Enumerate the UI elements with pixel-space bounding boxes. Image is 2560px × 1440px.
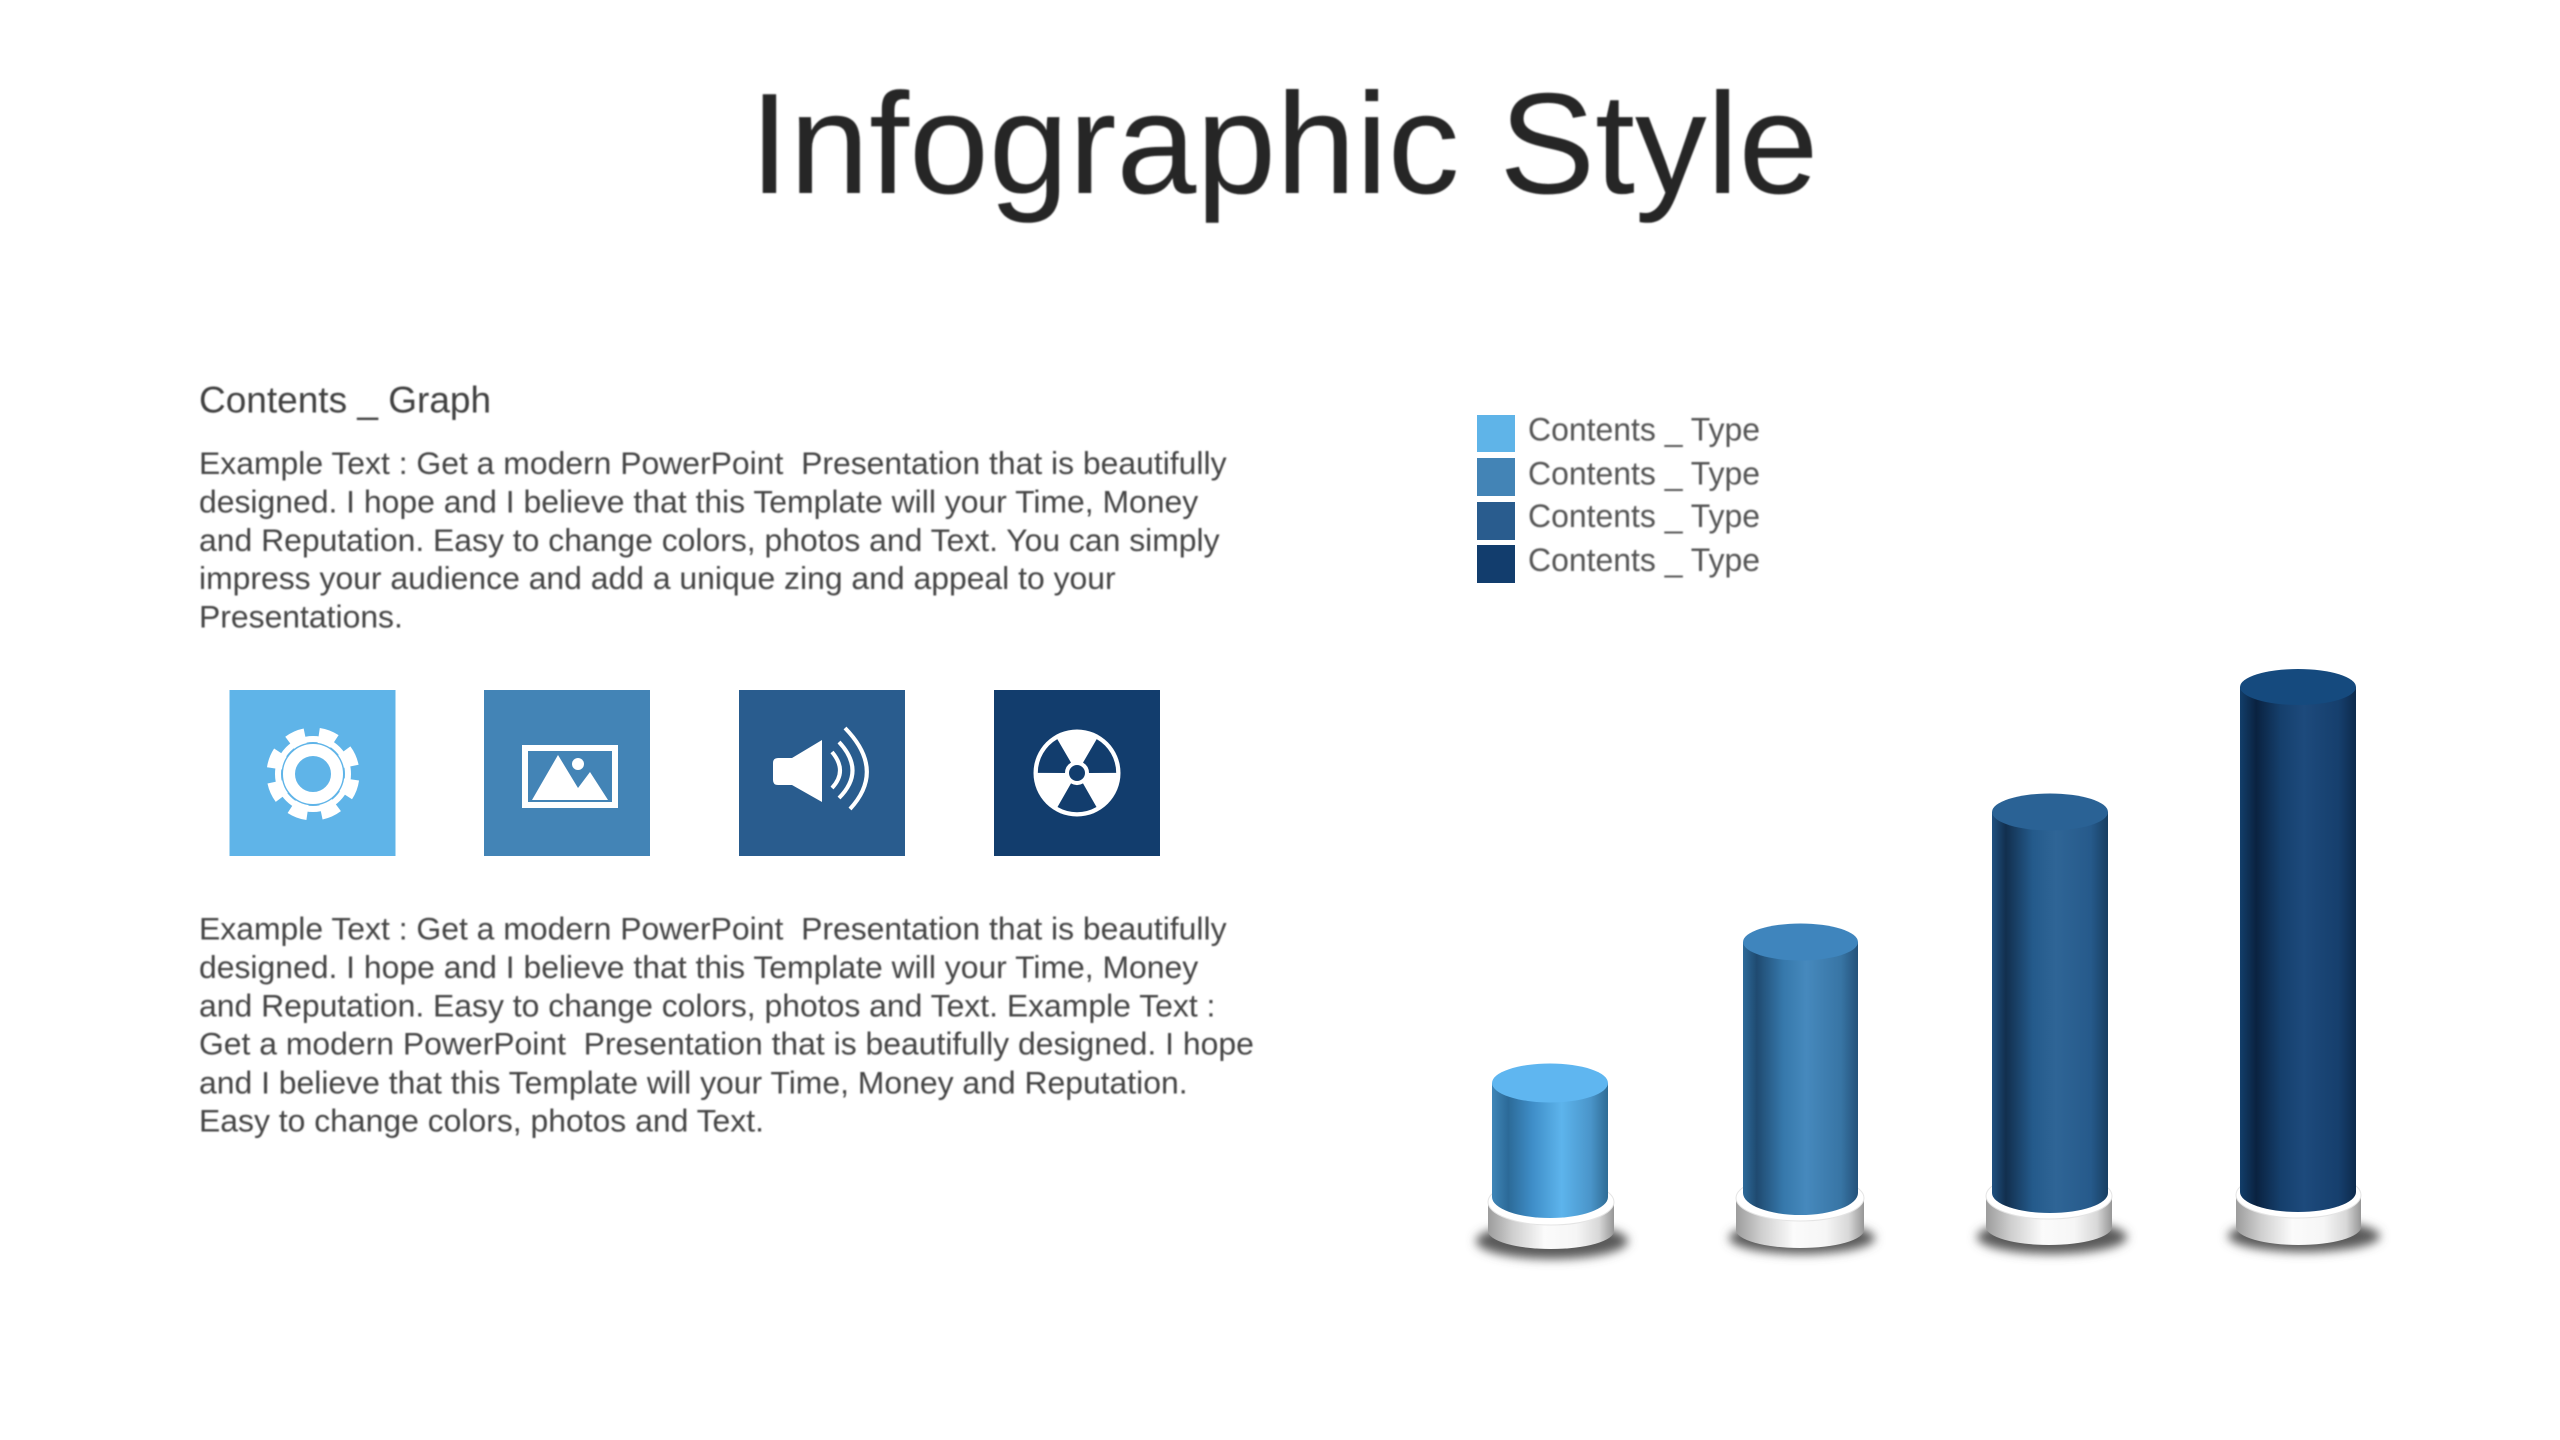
bar 1 [1476, 1064, 1628, 1259]
bar 4 [2228, 669, 2380, 1252]
legend item 1: Contents _ Type [1528, 412, 1760, 448]
text block: upper paragraph: Example Text : Get a modern PowerPoint Presentation that is beautifully [199, 445, 1227, 481]
chart: cylinder bars [1476, 669, 2380, 1259]
text block: upper paragraph: impress your audience and add a unique zing and appeal to your [199, 560, 1116, 596]
legend item 2: Contents _ Type [1528, 456, 1760, 492]
icon: picture [484, 690, 650, 856]
legend [1477, 412, 1760, 583]
bar 3 [1977, 794, 2127, 1254]
title: Infographic Style [750, 64, 1818, 224]
legend item 3: Contents _ Type [1528, 498, 1760, 534]
text block: lower paragraph: Example Text : Get a modern PowerPoint Presentation that is beautifully [199, 910, 1227, 946]
heading: contents graph: Contents _ Graph [199, 380, 491, 420]
text block: lower paragraph: Get a modern PowerPoint Presentation that is beautifully designed. I hope [199, 1026, 1254, 1062]
text block: lower paragraph: and I believe that this Template will your Time, Money and Reputation. [199, 1064, 1188, 1100]
icon row [230, 690, 1160, 856]
icon: speaker [739, 690, 905, 856]
text block: upper paragraph: and Reputation. Easy to change colors, photos and Text. You can simply [199, 522, 1220, 558]
text block: lower paragraph: Easy to change colors, photos and Text. [199, 1102, 764, 1138]
text block: lower paragraph: and Reputation. Easy to change colors, photos and Text. Example Text : [199, 988, 1215, 1024]
icon: gear [230, 690, 396, 856]
text block: upper paragraph: designed. I hope and I believe that this Template will your Time, Money [199, 484, 1198, 520]
icon: radiation [994, 690, 1160, 856]
text block: lower paragraph: designed. I hope and I believe that this Template will your Time, Money [199, 949, 1198, 985]
text block: lower paragraph [199, 910, 1254, 1138]
text block: upper paragraph: Presentations. [199, 598, 403, 634]
legend item 4: Contents _ Type [1528, 542, 1760, 578]
bar 2 [1729, 924, 1875, 1254]
text block: upper paragraph [199, 445, 1227, 634]
